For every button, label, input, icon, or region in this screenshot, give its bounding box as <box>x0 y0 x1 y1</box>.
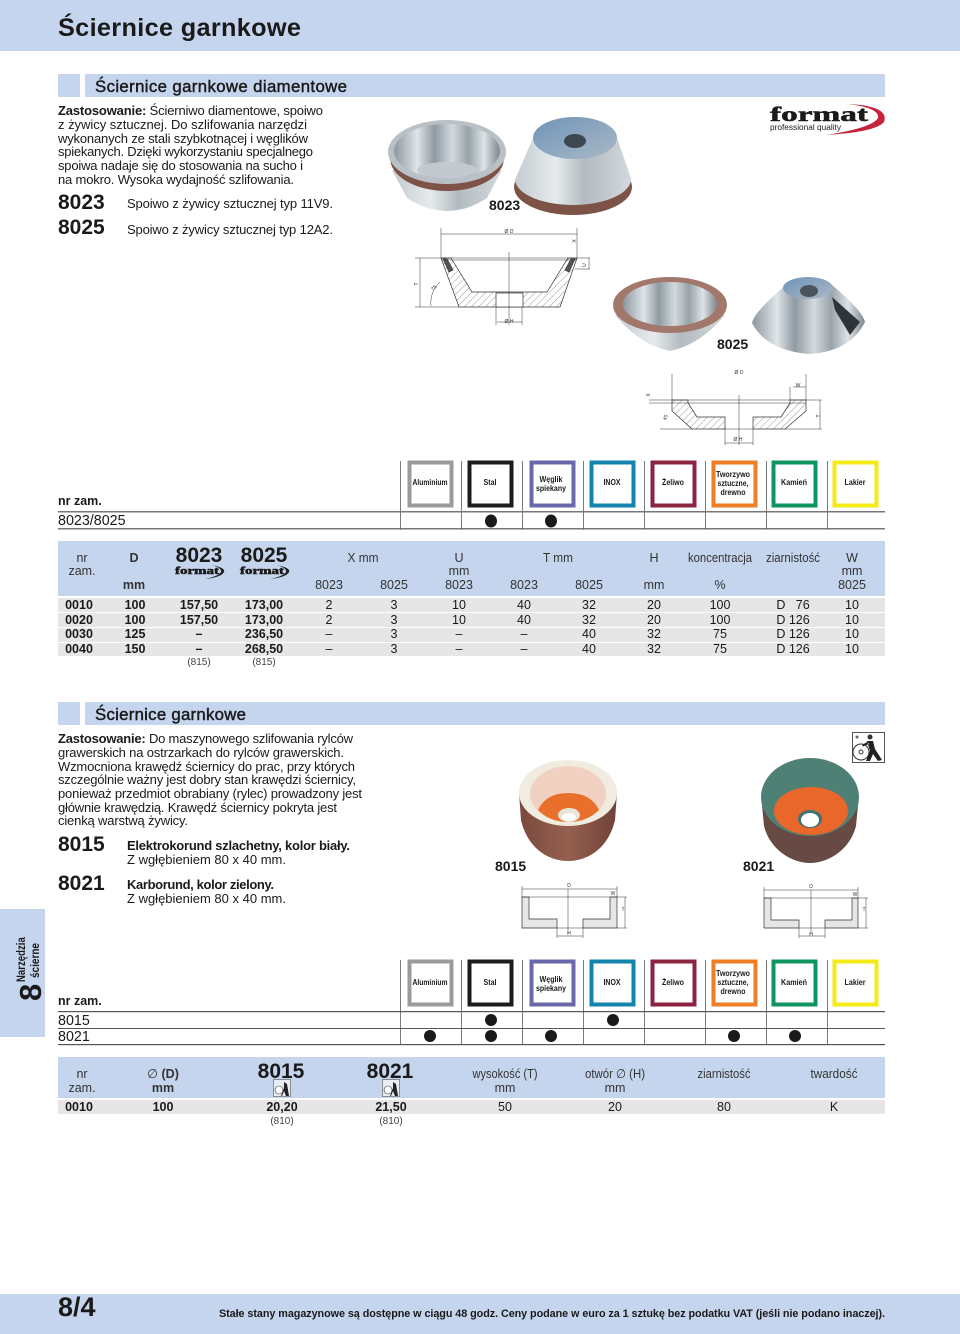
table 1 header: mm <box>842 564 862 578</box>
table 1 rows: 173,00 <box>245 613 283 627</box>
table 1 rows: 40 <box>517 598 531 612</box>
diagram labels <box>809 884 866 938</box>
table 1 rows: 0020 <box>65 613 93 627</box>
table 1 header: nr <box>76 551 88 565</box>
table 1 rows: 32 <box>582 613 596 627</box>
icon: Żeliwo: Żeliwo <box>662 477 684 487</box>
side tab: chapter 8: ścierne <box>29 943 42 978</box>
table 1 rows: – <box>521 627 528 641</box>
table 1 rows: D 76 <box>776 598 810 612</box>
table 1 rows: 100 <box>710 613 730 627</box>
table 1 header: 8025 <box>838 578 866 592</box>
diagram labels: Ø D <box>735 370 744 376</box>
material suitability table 2: nr zam. <box>58 994 102 1008</box>
text block: diamond wheels description: spoiwa nadaje się do stosowania na sucho i <box>58 158 303 173</box>
product lines 8015 and 8021: Z wgłębieniem 80 x 40 mm. <box>127 891 286 906</box>
table 1 header <box>58 541 885 596</box>
table 1 header: koncentracja <box>688 551 752 565</box>
product lines 8015 and 8021: Elektrokorund szlachetny, kolor biały. <box>127 838 350 853</box>
table 1 rows: (815) <box>252 657 276 668</box>
photo: 8015 white cup wheel <box>519 760 617 861</box>
icon: Aluminium <box>410 962 452 1004</box>
table 1 rows: 32 <box>647 642 661 656</box>
icon: Stal: Stal <box>484 977 496 987</box>
text block: diamond wheels description: na mokro. Wysoka wydajność szlifowania. <box>58 172 294 187</box>
table 1 header: format <box>175 566 220 577</box>
diagram labels: W <box>611 891 616 897</box>
table 1 rows: 268,50 <box>245 642 283 656</box>
product lines 8015 and 8021: 8021 <box>58 872 105 895</box>
logo: format professional quality: format <box>770 102 868 126</box>
footer note: Stałe stany magazynowe są dostępne w ciągu 48 godz. Ceny podane w euro za 1 sztukę bez podatku VAT (jeśli nie podano inaczej). <box>219 1308 885 1320</box>
text block: cup wheels description: grawerskich na ostrzarkach do rylców grawerskich. <box>58 745 344 760</box>
heading: diamond cup wheels: Ściernice garnkowe diamentowe <box>95 77 347 96</box>
text block: cup wheels description: Wzmocniona krawędź ściernicy do prac, przy których <box>58 759 355 774</box>
icon: Stal: Stal <box>484 477 496 487</box>
text block: diamond wheels description: spiekanych. Dzięki wykorzystaniu specjalnego <box>58 144 313 159</box>
footer band <box>0 1292 960 1334</box>
text block: diamond wheels description: wykonanych ze stali szybkotnącej i węglików <box>57 131 309 146</box>
table 1 header: % <box>714 578 726 592</box>
table 2 header: ∅ (D) <box>147 1067 179 1081</box>
table 1 rows: 0030 <box>65 627 93 641</box>
table 1 rows: 10 <box>845 642 859 656</box>
icon: mini man with wheel, 8021 <box>382 1080 400 1096</box>
diagram labels: T <box>862 907 866 913</box>
icon: Kamień: Kamień <box>781 977 807 987</box>
table 1 header: U <box>454 551 464 565</box>
table 1 rows: D 126 <box>776 627 810 641</box>
diagram labels: X <box>572 239 578 243</box>
diagram labels: T <box>816 414 822 418</box>
table 1 rows: 2 <box>326 598 333 612</box>
title: Ściernice garnkowe <box>58 12 301 42</box>
table 1 rows: 100 <box>710 598 730 612</box>
table 1 header: mm <box>123 578 145 592</box>
icon: Lakier: Lakier <box>844 977 866 987</box>
icon: Stal <box>470 462 512 506</box>
table 2 header: ziarnistość <box>698 1067 750 1081</box>
table 1 header: D <box>129 551 139 565</box>
table 1 rows: D 126 <box>776 613 810 627</box>
table 1 header: 8023 <box>176 544 222 567</box>
icon: Aluminium <box>410 462 452 506</box>
material suitability table 2: 8015 <box>58 1013 90 1029</box>
table 2 header: 8015 <box>258 1060 305 1083</box>
icon: INOX <box>592 462 634 506</box>
heading: diamond cup wheels <box>58 74 885 97</box>
diagram labels: 75 <box>430 284 439 292</box>
icon: Tworzywo sztuczne, drewno: sztuczne, <box>718 478 748 488</box>
diagram labels: T <box>414 282 420 286</box>
photo: 8025 wheels <box>613 277 865 354</box>
diagram labels: X <box>646 393 652 397</box>
heading: cup wheels <box>58 702 885 725</box>
photo: 8021 green cup wheel <box>761 758 859 863</box>
table 1 rows: 157,50 <box>180 613 218 627</box>
diagram labels: 45 <box>662 414 670 421</box>
table 1 header: 8023 <box>445 578 473 592</box>
icon: Węglik spiekany: Węglik <box>540 474 563 484</box>
text block: cup wheels description <box>58 731 362 828</box>
side tab: chapter 8 <box>0 909 48 1037</box>
table 2 row: 80 <box>717 1100 731 1114</box>
table 1 rows <box>58 598 885 668</box>
table 1 header: 8025 <box>241 544 288 567</box>
table 2 header: otwór ∅ (H) <box>585 1067 645 1081</box>
icon: Tworzywo sztuczne, drewno: Tworzywo <box>716 968 750 978</box>
table 1 rows: – <box>456 627 463 641</box>
diagram labels: H <box>567 931 571 937</box>
diagram labels: Ø H <box>734 437 743 443</box>
table 2 row: 100 <box>153 1100 173 1114</box>
table 1 rows: – <box>326 642 333 656</box>
photo: 8023 wheels <box>388 117 632 215</box>
icon: Tworzywo sztuczne, drewno <box>714 462 756 506</box>
table 1 header: 8025 <box>380 578 408 592</box>
label 8021: 8021 <box>743 858 774 874</box>
material icons row, table 2 <box>400 960 876 1045</box>
icon: Tworzywo sztuczne, drewno: drewno <box>720 487 746 497</box>
table 2 header: mm <box>152 1081 174 1095</box>
icon: Węglik spiekany <box>532 962 574 1004</box>
table 1 rows: – <box>196 627 203 641</box>
table 1 header: format <box>240 566 285 577</box>
table 2 header: twardość <box>810 1067 858 1081</box>
material suitability table 1 <box>58 494 885 530</box>
product lines 8023 and 8025 <box>58 191 333 239</box>
table 2 row: 20 <box>608 1100 622 1114</box>
diagram labels: W <box>796 383 801 389</box>
icon: Stal <box>470 962 512 1004</box>
product lines 8023 and 8025: Spoiwo z żywicy sztucznej typ 12A2. <box>127 222 333 237</box>
product lines 8023 and 8025: 8025 <box>58 216 105 239</box>
text block: cup wheels description: Zastosowanie: Do maszynowego szlifowania rylców <box>58 731 354 746</box>
diagram labels: D <box>567 883 571 889</box>
diagram labels <box>414 229 588 325</box>
icon: Tworzywo sztuczne, drewno <box>714 962 756 1004</box>
product lines 8023 and 8025: Spoiwo z żywicy sztucznej typ 11V9. <box>127 196 333 211</box>
logo: format professional quality <box>770 102 885 135</box>
product lines 8015 and 8021: Karborund, kolor zielony. <box>127 877 274 892</box>
table 2 header <box>58 1057 885 1098</box>
table 1 rows: – <box>326 627 333 641</box>
icon: Węglik spiekany <box>532 462 574 506</box>
table 2 row: 21,50 <box>375 1100 407 1114</box>
table 1 header: zam. <box>68 564 96 578</box>
diagram labels: W <box>853 892 858 898</box>
table 2 header: zam. <box>68 1081 96 1095</box>
text block: cup wheels description: szczególnie ważny jest dobry stan krawędzi ściernicy, <box>58 772 356 787</box>
icon: Aluminium: Aluminium <box>412 977 448 987</box>
text block: diamond wheels description: z żywicy sztucznej. Do szlifowania narzędzi <box>58 117 307 132</box>
product lines 8023 and 8025: 8023 <box>58 191 105 214</box>
diagram labels: Ø H <box>505 319 514 325</box>
icon: man with grinding wheel <box>852 732 884 762</box>
diagram: 8025 section <box>646 370 822 445</box>
table 2 row: (810) <box>379 1116 403 1127</box>
table 1 header: mm <box>644 578 664 592</box>
icon: Lakier <box>834 462 876 506</box>
table 1 rows: 173,00 <box>245 598 283 612</box>
table 1 rows: 10 <box>452 613 466 627</box>
logo: format professional quality: professional quality <box>770 122 842 132</box>
side tab: chapter 8: Narzędzia <box>15 936 28 982</box>
icon: Żeliwo: Żeliwo <box>662 977 684 987</box>
table 2 row: 20,20 <box>266 1100 298 1114</box>
text block: diamond wheels description: Zastosowanie: Ścierniwo diamentowe, spoiwo <box>58 103 323 118</box>
icon: INOX <box>592 962 634 1004</box>
diagram labels <box>567 883 625 937</box>
table 2 row: 0010 <box>65 1100 93 1114</box>
material suitability table 2: 8021 <box>58 1029 90 1045</box>
icon: Aluminium: Aluminium <box>412 477 448 487</box>
table 1 header: T mm <box>543 551 573 565</box>
table 1 rows: 0010 <box>65 598 93 612</box>
text block: diamond wheels description <box>57 103 323 187</box>
page number: 8/4 <box>58 1292 96 1322</box>
diagram: 8021 section <box>764 884 868 938</box>
material icons row, table 1 <box>400 461 876 530</box>
icon: INOX: INOX <box>604 977 621 987</box>
table 1 rows: – <box>521 642 528 656</box>
column separators <box>400 461 828 530</box>
icon: mini man with wheel, 8015 <box>274 1080 290 1096</box>
table 1 rows: 236,50 <box>245 627 283 641</box>
table 1 rows: 32 <box>582 598 596 612</box>
icon: Kamień <box>774 462 816 506</box>
diagram: 8015 section <box>522 883 627 938</box>
table 1 rows: 0040 <box>65 642 93 656</box>
table 1 rows: 20 <box>647 598 661 612</box>
table 1 rows: 3 <box>391 642 398 656</box>
icon: Węglik spiekany: spiekany <box>536 983 566 993</box>
icon: Tworzywo sztuczne, drewno: Tworzywo <box>716 469 750 479</box>
product lines 8015 and 8021: Z wgłębieniem 80 x 40 mm. <box>127 852 286 867</box>
table 1 rows: 10 <box>845 613 859 627</box>
table 1 rows: 2 <box>326 613 333 627</box>
table 2 header: 8021 <box>367 1060 414 1083</box>
icon: Węglik spiekany: spiekany <box>536 483 566 493</box>
table 1 rows: 40 <box>582 627 596 641</box>
side tab: chapter 8: 8 <box>13 984 48 1001</box>
table 1 rows: 125 <box>125 627 145 641</box>
icon: INOX: INOX <box>604 477 621 487</box>
table 1 rows: 40 <box>582 642 596 656</box>
table 1 rows: 3 <box>391 598 398 612</box>
table 1 header: 8023 <box>315 578 343 592</box>
table 1 rows: – <box>456 642 463 656</box>
table 2 header: mm <box>605 1081 625 1095</box>
diagram labels <box>646 370 822 443</box>
text block: cup wheels description: ponieważ przedmiot obrabiany (rylec) prowadzony jest <box>58 786 362 801</box>
table 2 header: wysokość (T) <box>472 1067 538 1081</box>
diagram labels: H <box>809 932 813 938</box>
table 1 rows: – <box>196 642 203 656</box>
icon: Kamień: Kamień <box>781 477 807 487</box>
heading: cup wheels: Ściernice garnkowe <box>95 705 246 724</box>
label 8015: 8015 <box>495 858 526 874</box>
diagram labels: T <box>621 907 625 913</box>
table 1 rows: D 126 <box>776 642 810 656</box>
label 8025: 8025 <box>717 336 748 352</box>
table 1 header: 8023 <box>510 578 538 592</box>
table 2 row: (810) <box>270 1116 294 1127</box>
table 2 row <box>58 1100 885 1127</box>
table 1 rows: 3 <box>391 627 398 641</box>
icon: Lakier: Lakier <box>844 477 866 487</box>
table 1 rows: 75 <box>713 627 727 641</box>
table 1 rows: 20 <box>647 613 661 627</box>
text block: cup wheels description: głównie krawędzią. Krawędź ściernicy pokryta jest <box>58 800 337 815</box>
material suitability table 1: nr zam. <box>58 494 102 508</box>
table 1: diamond wheels specifications <box>58 541 885 668</box>
table 2 header: mm <box>495 1081 515 1095</box>
material suitability table 1: 8023/8025 <box>58 513 126 529</box>
table 1 rows: 10 <box>845 627 859 641</box>
diagram labels: U <box>582 263 588 267</box>
icon: Żeliwo <box>652 462 694 506</box>
table 1 rows: 150 <box>125 642 145 656</box>
product lines 8015 and 8021: 8015 <box>58 833 105 856</box>
table 1 header: mm <box>449 564 469 578</box>
table 1 rows: 32 <box>647 627 661 641</box>
table 2 header: nr <box>76 1067 88 1081</box>
material suitability table 2 <box>58 994 885 1045</box>
product lines 8015 and 8021 <box>58 833 350 906</box>
column separators <box>400 960 828 1045</box>
table 2 row: K <box>830 1100 839 1114</box>
table 1 rows: 100 <box>125 598 145 612</box>
table 1 header: X mm <box>348 551 378 565</box>
icon: Lakier <box>834 962 876 1004</box>
table 2 row: 50 <box>498 1100 512 1114</box>
table 1 rows: 10 <box>452 598 466 612</box>
table 2: cup wheels specifications <box>58 1057 885 1127</box>
table 1 header: H <box>649 551 659 565</box>
table 1 header: W <box>846 551 858 565</box>
table 1 header: 8025 <box>575 578 603 592</box>
icon: Kamień <box>774 962 816 1004</box>
table 1 rows: 10 <box>845 598 859 612</box>
table 1 rows: 100 <box>125 613 145 627</box>
table 1 rows: 3 <box>391 613 398 627</box>
diagram: 8023 section <box>414 228 590 325</box>
icon: Węglik spiekany: Węglik <box>540 974 563 984</box>
icon: Tworzywo sztuczne, drewno: drewno <box>720 986 746 996</box>
table 1 header: ziarnistość <box>766 551 820 565</box>
table 1 rows: 75 <box>713 642 727 656</box>
page title band <box>0 0 960 51</box>
table 1 rows: 157,50 <box>180 598 218 612</box>
diagram labels: Ø D <box>505 229 514 235</box>
table 1 rows: (815) <box>187 657 211 668</box>
icon: Tworzywo sztuczne, drewno: sztuczne, <box>718 977 748 987</box>
text block: cup wheels description: cienką warstwą żywicy. <box>58 813 188 828</box>
label 8023: 8023 <box>489 197 520 213</box>
table 1 rows: 40 <box>517 613 531 627</box>
diagram labels: D <box>809 884 813 890</box>
icon: Żeliwo <box>652 962 694 1004</box>
